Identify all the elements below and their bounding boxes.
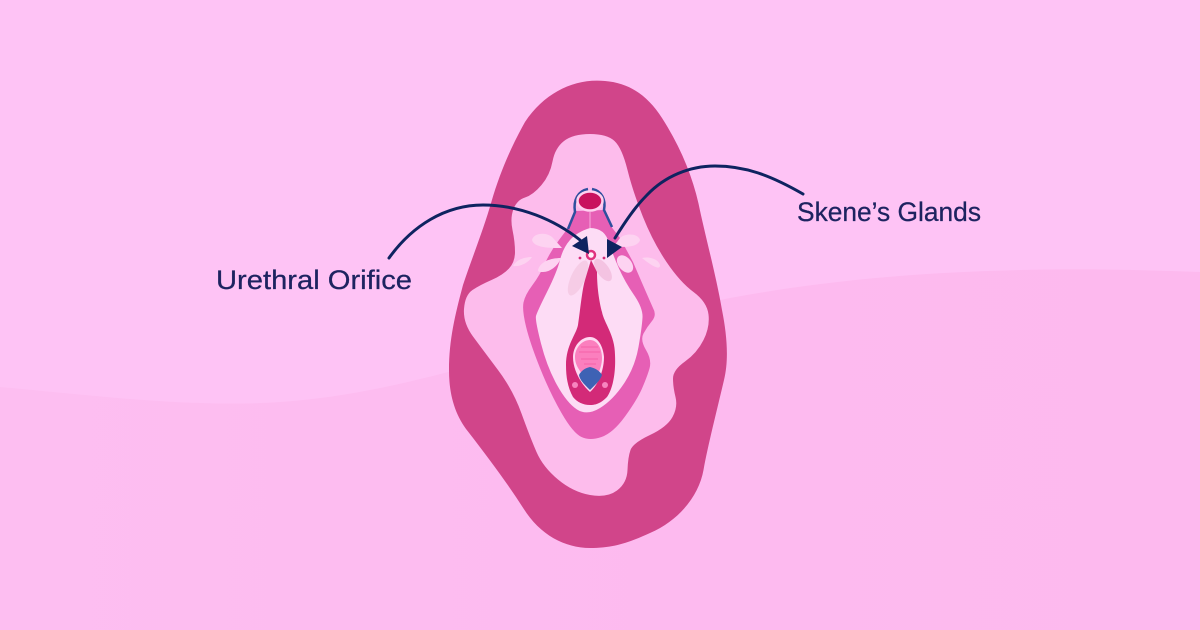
Skene's gland dot left <box>579 257 581 259</box>
Bartholin dot left <box>572 382 578 388</box>
lobe upper right <box>614 234 640 247</box>
clitoris <box>578 192 602 210</box>
Skene's gland dot right <box>603 257 605 259</box>
arrow to Skene's glands <box>607 166 803 258</box>
labia minora band <box>523 220 655 439</box>
clitoral hood <box>568 210 612 236</box>
anatomy illustration <box>449 81 727 548</box>
vaginal wall <box>575 340 602 374</box>
vaginal channel <box>566 260 615 405</box>
periurethral lobe left <box>564 258 592 298</box>
center line <box>589 212 591 228</box>
clitoris outline <box>568 189 612 229</box>
lobe mid right <box>614 252 636 276</box>
gland lobes <box>513 234 660 276</box>
vestibule <box>536 228 643 412</box>
outer shape <box>449 81 727 548</box>
urethral orifice <box>587 251 595 259</box>
label: Urethral Orifice: Urethral Orifice <box>216 265 412 295</box>
background wave <box>0 269 1200 630</box>
lobe far right <box>642 257 660 268</box>
Bartholin dot right <box>602 382 608 388</box>
inner light shape <box>464 134 709 496</box>
label: Skene's Glands: Skene’s Glands <box>797 197 981 227</box>
cervix blue diamond <box>579 367 602 390</box>
lobe upper left <box>532 234 562 248</box>
vaginal ridges <box>579 347 600 364</box>
periurethral lobe right <box>591 256 615 284</box>
lobe mid left <box>538 258 561 272</box>
vaginal opening rim <box>573 337 604 392</box>
arrow to urethral orifice <box>389 205 589 258</box>
lobe far left <box>513 257 532 266</box>
